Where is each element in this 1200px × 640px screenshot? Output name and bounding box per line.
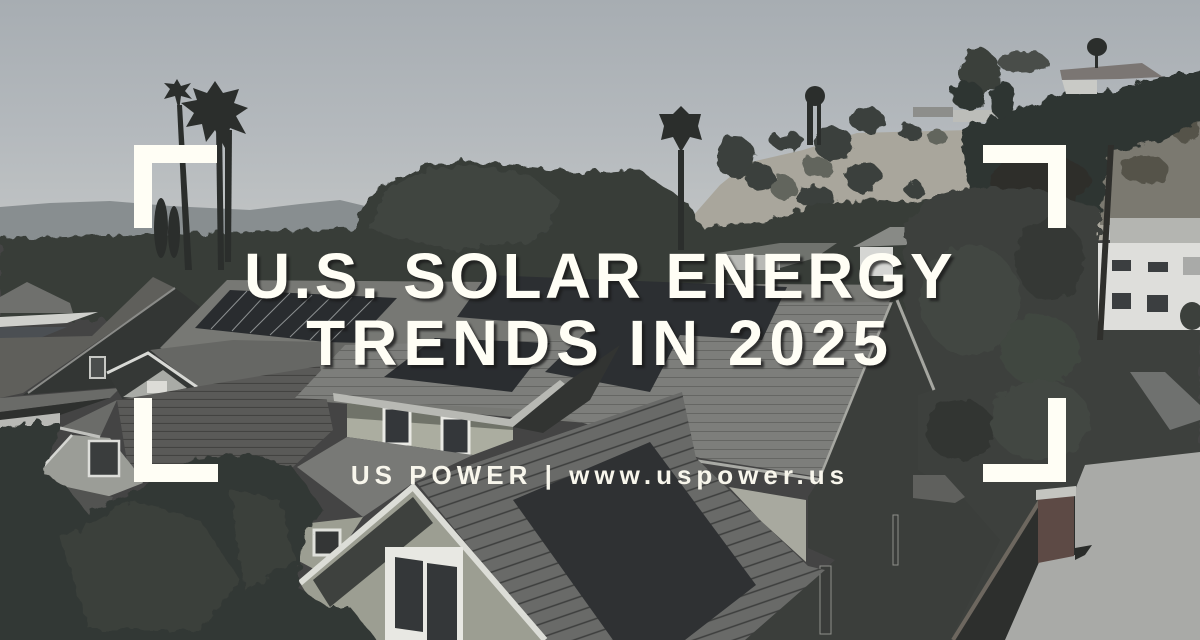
far-left house: [0, 282, 73, 313]
left dark gable: [23, 288, 200, 395]
house side windows: [820, 515, 898, 634]
left small attic window: [90, 357, 105, 378]
bracket: bottom left: [134, 398, 218, 482]
solar array: lower centre: [384, 338, 550, 392]
subtitle: brand and website: US POWER | www.uspower.us: [351, 460, 849, 490]
hilltop house: [1060, 63, 1163, 80]
solar array: upper centre: [457, 275, 787, 392]
distant mountains: [0, 200, 380, 240]
brick chimney: [1038, 494, 1074, 563]
bracket: top right: [983, 145, 1066, 228]
hill shrubs: [715, 107, 1199, 207]
shadow under dormer eave: [513, 345, 620, 433]
grey roof below dormer: [297, 437, 473, 517]
grey roof far right: [1130, 372, 1200, 430]
white gable dormer, left: [107, 352, 197, 400]
left lower strips: [0, 388, 120, 412]
house dark wall: [745, 302, 1000, 640]
light roof at lower-right: [1005, 452, 1200, 640]
main back roof: [160, 280, 900, 440]
mid-ground tree line: [0, 160, 967, 320]
title: TRENDS IN 2025: [306, 307, 894, 379]
front ridged roof: [417, 392, 825, 640]
chimney shadow: [1075, 545, 1092, 560]
white building at right: [1098, 243, 1200, 330]
dormer windows: [384, 408, 469, 454]
solar array: back left: [195, 290, 397, 345]
hillside: [685, 130, 1107, 250]
title: U.S. SOLAR ENERGY: [244, 240, 956, 312]
sky: [0, 0, 1200, 240]
utility pole: [1097, 145, 1114, 340]
dormer siding: [347, 403, 513, 455]
small side roof: [913, 475, 965, 503]
lower back roof: [150, 340, 367, 387]
palm trees: [154, 38, 1107, 270]
gable window: [385, 547, 463, 640]
lower-left gable wall: [40, 435, 143, 497]
wall behind front gable: [293, 517, 363, 575]
bracket: top left: [134, 145, 217, 228]
left roof: [0, 277, 175, 398]
fence strip and alley: [953, 490, 1075, 640]
distant rooftops behind main house: [717, 243, 837, 268]
big dark roof, lower left: [117, 366, 333, 480]
siding below right roof: [729, 487, 806, 562]
front solar panel: [513, 442, 756, 640]
bracket: bottom right: [983, 398, 1066, 482]
central roof with shingles: [295, 302, 893, 477]
front gable wall: [300, 485, 543, 640]
foreground tree, left: [0, 423, 385, 640]
right hillside: [1100, 113, 1200, 225]
small roof behind foreground tree: [67, 487, 113, 515]
large tree, right: [905, 187, 1200, 640]
dormer eave: [333, 380, 565, 427]
title: [244, 240, 956, 379]
tree highlights and shadows: [920, 220, 1090, 460]
top right hill trees: [951, 50, 1200, 215]
hilltop low house: [913, 107, 953, 117]
